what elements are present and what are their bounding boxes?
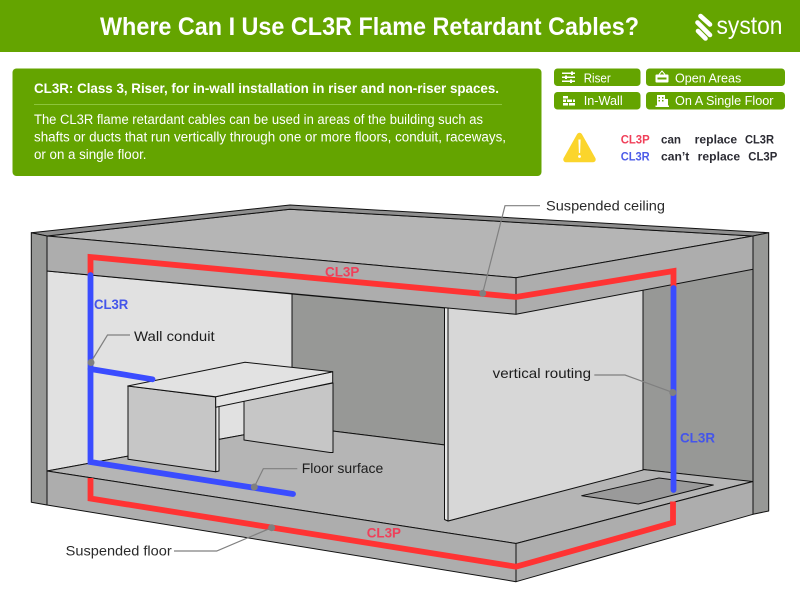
icon: bricks bbox=[563, 96, 575, 106]
ceiling rim bbox=[31, 205, 769, 236]
blue CL3R right cable bbox=[671, 288, 676, 490]
cable labels bbox=[94, 264, 715, 541]
icon: sliders bbox=[562, 72, 575, 83]
callout: Floor surface: Floor surface bbox=[302, 460, 384, 476]
chip: Riser bbox=[554, 68, 640, 86]
syston logo: syston bbox=[716, 12, 782, 40]
callout: Suspended floor: Suspended floor bbox=[66, 543, 172, 559]
replacement rules bbox=[621, 134, 778, 164]
red CL3P floor cable bbox=[90, 478, 673, 567]
chip: Riser: Riser bbox=[584, 70, 611, 86]
right wall bbox=[643, 269, 753, 482]
header banner bbox=[0, 0, 800, 52]
panel body text: or on a single floor. bbox=[34, 147, 146, 162]
callout: Wall conduit: Wall conduit bbox=[134, 328, 215, 344]
floor front left face bbox=[47, 471, 516, 582]
replacement rules: replace bbox=[698, 152, 740, 164]
back wall bbox=[292, 294, 445, 445]
chip: Open Areas bbox=[646, 68, 785, 86]
icon: building bbox=[656, 95, 669, 107]
replacement rules: can’t bbox=[661, 152, 689, 164]
chip: In-Wall: In-Wall bbox=[584, 93, 623, 108]
chip: On A Single Floor: On A Single Floor bbox=[675, 93, 774, 108]
right pillar bbox=[753, 233, 769, 514]
replacement rules: CL3P bbox=[748, 152, 778, 164]
panel: CL3R definition bbox=[12, 68, 542, 176]
replacement rules: CL3R bbox=[745, 134, 775, 146]
red CL3P ceiling cable bbox=[90, 257, 674, 297]
replacement rules: can bbox=[661, 134, 681, 146]
partition wall bbox=[444, 306, 448, 521]
callout: vertical routing bbox=[493, 365, 676, 396]
callout: Suspended floor bbox=[66, 524, 275, 559]
cable labels: CL3R bbox=[94, 296, 128, 312]
ceiling top bbox=[47, 209, 753, 278]
desk bbox=[128, 362, 333, 472]
panel body text bbox=[34, 112, 506, 162]
chip: In-Wall bbox=[554, 92, 640, 110]
callout: Suspended ceiling: Suspended ceiling bbox=[546, 198, 665, 214]
ceiling front right face bbox=[516, 236, 753, 314]
replacement rules: CL3R bbox=[621, 152, 650, 164]
callout: Suspended ceiling bbox=[479, 198, 665, 297]
cable labels: CL3P bbox=[367, 525, 401, 541]
callout: vertical routing: vertical routing bbox=[493, 365, 591, 381]
left pillar bbox=[31, 233, 47, 505]
panel body text: shafts or ducts that run vertically through one or more floors, conduit, raceways, bbox=[34, 130, 506, 144]
title: Where Can I Use CL3R Flame Retardant Cables? bbox=[100, 13, 639, 41]
floor top bbox=[47, 426, 752, 544]
replacement rules: CL3P bbox=[621, 134, 650, 146]
ceiling front left face bbox=[47, 236, 516, 314]
floor hatch bbox=[582, 478, 713, 504]
chip: On A Single Floor bbox=[646, 92, 785, 110]
replacement rules: replace bbox=[695, 134, 737, 146]
icon: open sign bbox=[656, 71, 668, 82]
cable labels: CL3R bbox=[680, 430, 715, 446]
chip: Open Areas: Open Areas bbox=[675, 70, 742, 86]
panel heading: CL3R: Class 3, Riser, for in-wall installation in riser and non-riser spaces. bbox=[34, 80, 499, 96]
panel body text: The CL3R flame retardant cables can be used in areas of the building such as bbox=[34, 112, 483, 127]
cable labels: CL3P bbox=[325, 264, 359, 280]
left wall bbox=[47, 271, 292, 471]
room illustration bbox=[31, 205, 769, 582]
blue CL3R left cable bbox=[90, 275, 293, 494]
callout: Wall conduit bbox=[88, 328, 215, 366]
callout: Floor surface bbox=[251, 460, 384, 490]
floor front right face bbox=[516, 482, 753, 582]
icon: warning triangle bbox=[566, 136, 593, 160]
